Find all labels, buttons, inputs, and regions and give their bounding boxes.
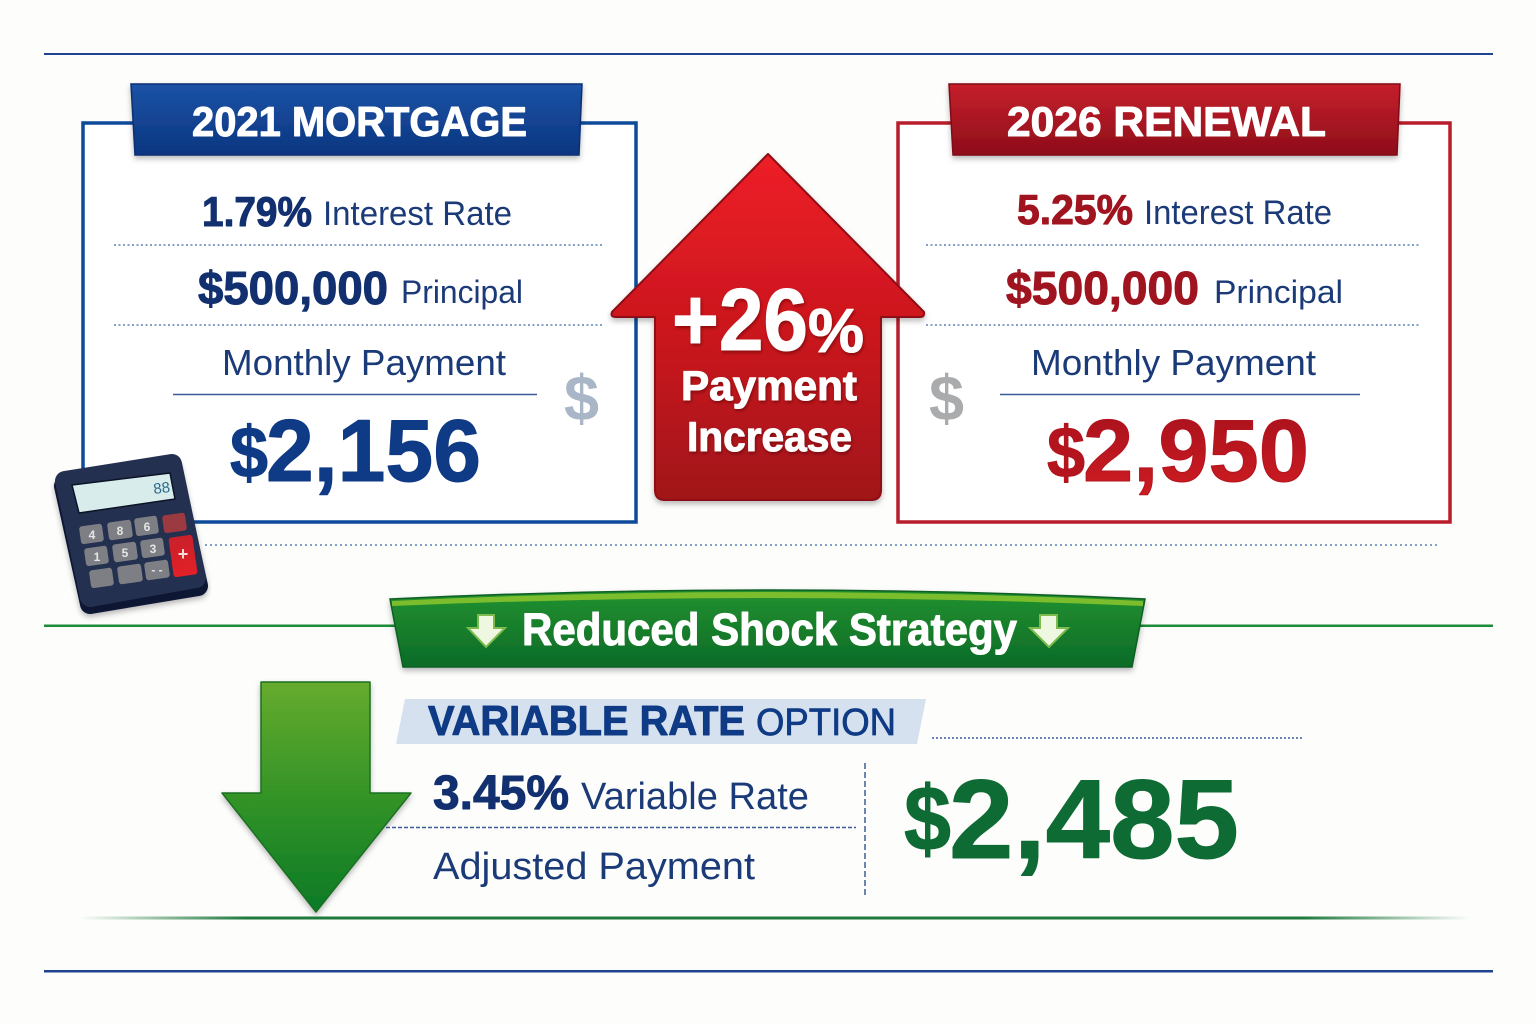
icon: calculator: 8 bbox=[117, 524, 124, 538]
icon: calculator: 6 bbox=[144, 520, 151, 534]
banner: 2021 mortgage bbox=[131, 84, 582, 155]
label: adjusted payment: Adjusted Payment bbox=[433, 846, 755, 888]
icon: small arrow left bbox=[468, 615, 505, 647]
icon: calculator: 3 bbox=[150, 542, 157, 556]
banner: 2026 renewal: 2026 RENEWAL bbox=[1007, 98, 1326, 145]
green section rule bbox=[44, 624, 1493, 627]
label: monthly payment 2021: Monthly Payment bbox=[222, 342, 506, 383]
row: interest rate 2021: Interest Rate bbox=[323, 195, 512, 233]
payment 2026: $ bbox=[1047, 413, 1085, 493]
arrow: +26% payment increase bbox=[612, 154, 924, 500]
row: interest rate 2026 bbox=[1017, 186, 1332, 233]
panel: variable rate option bbox=[386, 697, 1304, 895]
payment 2021: 2,156 bbox=[266, 401, 481, 500]
panel frame: 2026 bbox=[898, 123, 1450, 522]
payment 2021: $ bbox=[230, 413, 268, 493]
row: principal 2021: Principal bbox=[401, 274, 523, 310]
callout: +26%: +26 bbox=[672, 270, 808, 369]
icon: calculator: 4 bbox=[89, 528, 96, 542]
row: principal 2021: $500,000 bbox=[198, 262, 388, 314]
panel frame: 2021 bbox=[83, 123, 636, 522]
icon: calculator: 5 bbox=[122, 546, 129, 560]
label: payment increase: Payment bbox=[681, 362, 857, 409]
row: variable rate: 3.45% bbox=[433, 767, 569, 820]
icon: dollar sign 2021: $ bbox=[564, 362, 599, 434]
panel: 2021 mortgage bbox=[83, 84, 636, 522]
icon: calculator: 88 bbox=[152, 479, 171, 498]
icon: small arrow right bbox=[1030, 615, 1068, 647]
calculator screen bbox=[72, 473, 175, 513]
banner: reduced shock strategy bbox=[390, 590, 1145, 667]
label: payment increase: Increase bbox=[687, 413, 852, 460]
icon: calculator: - - bbox=[151, 563, 163, 577]
row: principal 2021 bbox=[198, 262, 523, 314]
callout: +26%: % bbox=[808, 297, 864, 366]
row: variable rate: Variable Rate bbox=[581, 776, 809, 818]
icon: calculator: + bbox=[178, 544, 188, 564]
label: payment increase bbox=[681, 362, 857, 460]
payment: variable: $ bbox=[904, 768, 951, 870]
bottom rule bbox=[44, 970, 1493, 972]
row: variable rate bbox=[433, 767, 809, 820]
banner: 2026 renewal bbox=[949, 84, 1400, 155]
icon: calculator: 1 bbox=[94, 550, 101, 564]
calculator base edge bbox=[64, 467, 198, 604]
row: interest rate 2021 bbox=[202, 188, 512, 235]
calculator keys bbox=[79, 515, 170, 588]
label: monthly payment 2026: Monthly Payment bbox=[1031, 342, 1316, 383]
row: principal 2026: $500,000 bbox=[1006, 262, 1199, 314]
row: interest rate 2026: Interest Rate bbox=[1144, 194, 1332, 232]
row: principal 2026: Principal bbox=[1214, 274, 1343, 310]
top rule bbox=[44, 53, 1493, 55]
payment: variable: 2,485 bbox=[949, 757, 1239, 882]
banner title: Reduced Shock Strategy bbox=[522, 604, 1017, 655]
panel: 2026 renewal bbox=[898, 84, 1450, 522]
row: interest rate 2026: 5.25% bbox=[1017, 186, 1133, 233]
icon: calculator bbox=[64, 464, 198, 604]
green base rule bbox=[80, 916, 1470, 920]
row: principal 2026 bbox=[1006, 262, 1343, 314]
payment 2026: 2,950 bbox=[1083, 401, 1309, 500]
dotted separator under panels bbox=[205, 544, 1440, 546]
arrow: green down bbox=[222, 682, 411, 912]
icon: dollar sign 2026: $ bbox=[929, 362, 964, 434]
row: interest rate 2021: 1.79% bbox=[202, 188, 312, 235]
calculator body bbox=[65, 464, 196, 597]
banner: 2021 mortgage: 2021 MORTGAGE bbox=[192, 98, 527, 145]
heading: variable rate option: OPTION bbox=[756, 702, 896, 744]
heading: variable rate option: VARIABLE RATE bbox=[428, 697, 745, 744]
heading: variable rate option bbox=[396, 697, 926, 744]
